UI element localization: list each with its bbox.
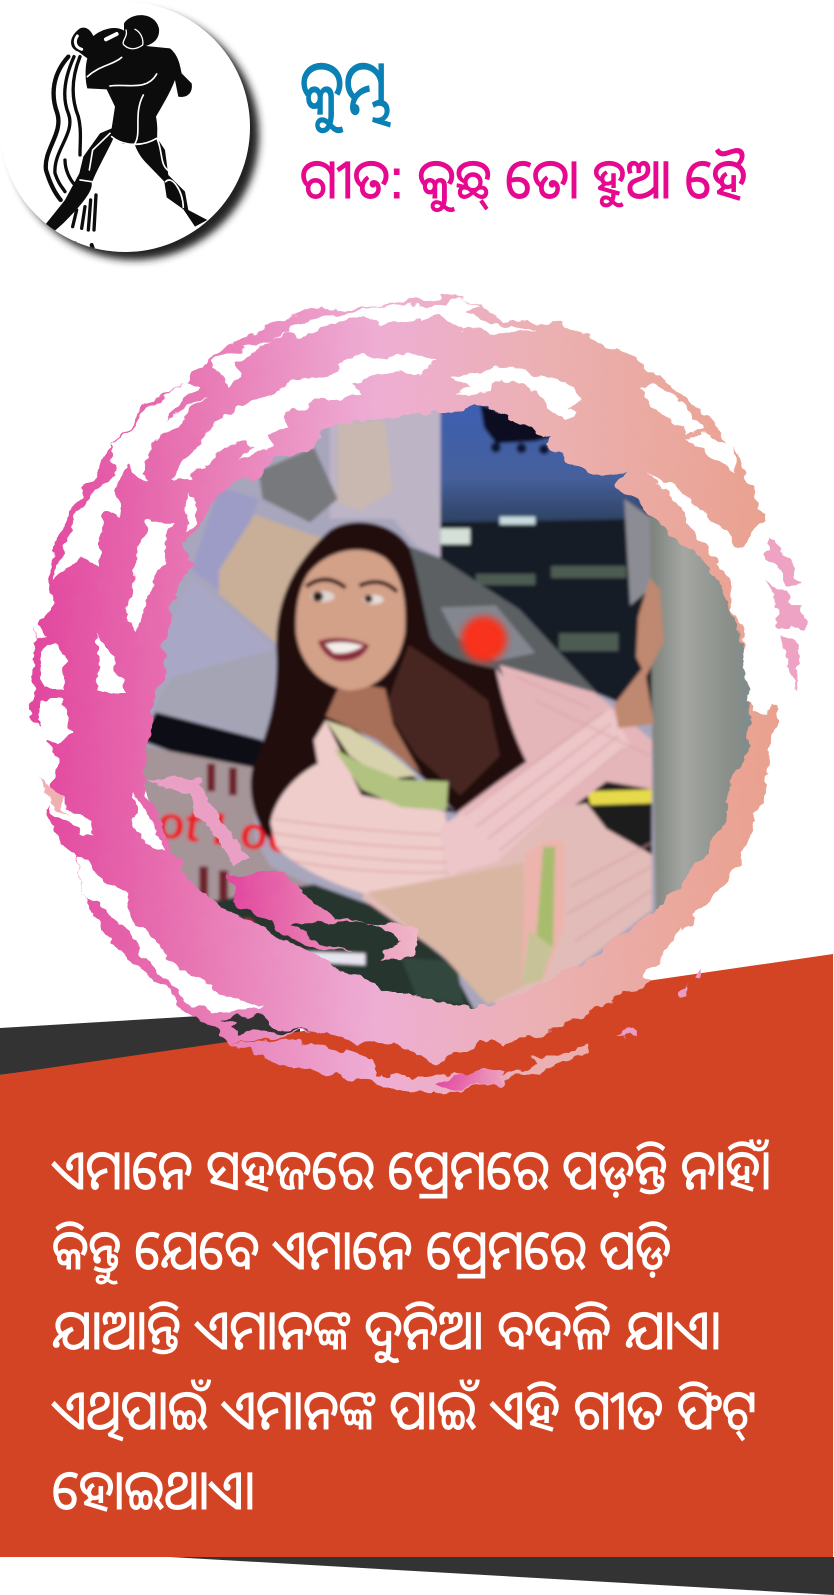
icon: water bearer figure <box>45 15 207 250</box>
woman: sweater <box>500 665 652 789</box>
orange text panel background <box>0 954 833 1557</box>
line 2: କିନ୍ତୁ ଯେବେ ଏମାନେ ପ୍ରେମରେ ପଡ଼ି <box>52 1219 671 1284</box>
street bottom left <box>213 882 476 1009</box>
street pole <box>650 511 761 914</box>
white torn flakes lower left <box>40 700 263 1015</box>
pink overlay: stroke by sign <box>143 777 247 863</box>
zodiac badge: aquarius <box>0 2 259 260</box>
badge shadow <box>9 10 259 260</box>
ring sliver highlight <box>435 1070 520 1089</box>
ring main stroke <box>30 297 790 1062</box>
dark band upper left <box>0 1010 300 1075</box>
circular photo of smiling woman <box>132 392 769 1029</box>
woman: hair <box>251 522 527 841</box>
sweater shoulder behind hair <box>456 668 608 815</box>
woman: hand <box>614 578 664 728</box>
line 5: ହୋଇଥାଏ। <box>52 1459 256 1521</box>
hair filler at left of neck <box>293 712 457 814</box>
subtitle: song name: ଗୀତ: କୁଛ୍ ତୋ ହୁଆ ହୈ <box>300 148 747 212</box>
woman: neck <box>326 681 421 774</box>
truss and red light <box>409 546 599 700</box>
body paragraph <box>51 1139 772 1521</box>
title: sign name: କୁମ୍ଭ <box>300 46 392 133</box>
storefront sign in photo: ot Locker <box>155 796 364 872</box>
sky and dark building <box>440 396 654 530</box>
white torn flakes lower right <box>643 700 787 978</box>
pink flakes at right edge <box>765 540 805 687</box>
painted ring frame <box>30 297 833 1093</box>
woman: face <box>296 550 405 691</box>
small pink flakes on orange <box>620 967 707 1037</box>
dark band bottom right <box>170 1557 834 1595</box>
yellow sign <box>575 780 654 856</box>
ring lower sliver <box>233 1040 590 1093</box>
pink overlay: band lower left <box>227 873 417 957</box>
photo backdrop <box>146 426 658 1009</box>
woman: scarf <box>326 720 417 779</box>
pink paint overlays on photo <box>143 777 417 957</box>
line 4: ଏଥିପାଇଁ ଏମାନଙ୍କ ପାଇଁ ଏହି ଗୀତ ଫିଟ୍ <box>51 1379 757 1441</box>
dark flake on ring lower left <box>220 1015 313 1035</box>
line 3: ଯାଆନ୍ତି ଏମାନଙ୍କ ଦୁନିଆ ବଦଳି ଯାଏ। <box>52 1299 722 1363</box>
badge disc <box>0 2 250 252</box>
white torn flakes upper left <box>33 303 420 690</box>
white torn flakes upper right <box>420 300 833 703</box>
